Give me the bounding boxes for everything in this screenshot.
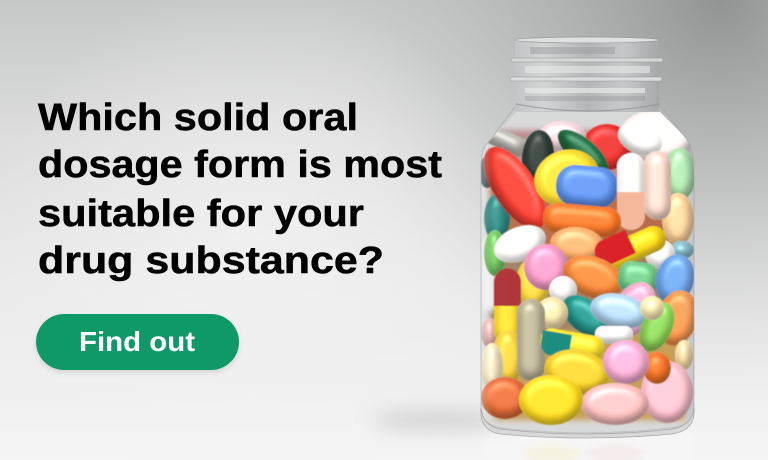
heading: dosage form is most: [38, 144, 442, 186]
heading: Which solid oral: [38, 97, 358, 139]
jar reflection: [484, 434, 692, 460]
button: find out: Find out: [79, 326, 195, 357]
heading: [38, 97, 442, 282]
jar with pills: [472, 37, 704, 438]
button: find out: [36, 314, 239, 373]
glass body: [481, 106, 694, 433]
pills underlay: [482, 130, 690, 420]
jar interior: [481, 112, 694, 433]
jar base: [481, 408, 694, 438]
heading: drug substance?: [38, 240, 384, 282]
jar shadow: [370, 411, 510, 429]
pills: [472, 110, 704, 425]
jar neck: [510, 37, 663, 111]
heading: suitable for your: [38, 193, 364, 235]
